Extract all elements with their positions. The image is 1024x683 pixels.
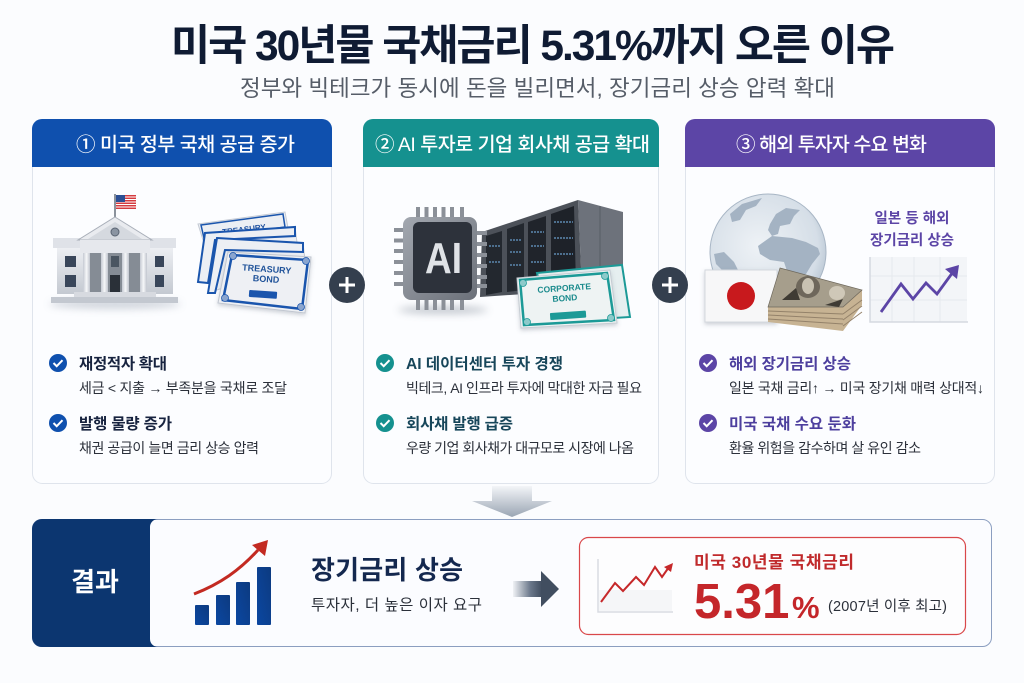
panel: result bbox=[32, 519, 992, 647]
icon: plus between panels 1 and 2 bbox=[329, 267, 365, 303]
bullet: AI data center bbox=[376, 354, 642, 396]
bullet: weak treasury demand bbox=[699, 414, 921, 456]
icon: AI chip: AI bbox=[425, 234, 462, 283]
arrow: to result value bbox=[513, 571, 559, 607]
icon: corporate bonds bbox=[517, 265, 630, 328]
icon: globe bbox=[710, 194, 826, 310]
bullet: fiscal deficit: 세금 < 지출 → 부족분을 국채로 조달 bbox=[79, 380, 287, 396]
panel 2 header: ② AI 투자로 기업 회사채 공급 확대 bbox=[375, 134, 650, 156]
bullet: overseas rates rising bbox=[699, 354, 984, 396]
icon: plus between panels 2 and 3 bbox=[652, 267, 688, 303]
bullet: corporate bond surge: 회사채 발행 급증 bbox=[406, 415, 513, 433]
panel 1 header: ① 미국 정부 국채 공급 증가 bbox=[76, 134, 295, 156]
panel 2 header bbox=[363, 119, 659, 167]
icon: treasury bonds: BOND bbox=[253, 273, 280, 285]
icon: corporate bonds: BOND bbox=[552, 292, 578, 304]
panel 1 header bbox=[32, 119, 332, 167]
callout label: 미국 30년물 국채금리 bbox=[694, 553, 854, 572]
bullet: issuance increase bbox=[49, 414, 259, 456]
bullet: fiscal deficit bbox=[49, 354, 287, 396]
bullet: corporate bond surge: 우량 기업 회사채가 대규모로 시장에 나옴 bbox=[406, 440, 634, 456]
chart: mini rising line bbox=[598, 559, 673, 612]
callout: 5.31% bbox=[580, 538, 966, 634]
text: long-term rates up: 장기금리 상승 bbox=[311, 555, 463, 585]
bullet: issuance increase: 채권 공급이 늘면 금리 상승 압력 bbox=[79, 440, 259, 456]
panel 3 header: ③ 해외 투자자 수요 변화 bbox=[736, 134, 927, 156]
text: long-term rates up bbox=[311, 555, 482, 614]
panel 3 header bbox=[685, 119, 995, 167]
arrow: down to result bbox=[472, 486, 552, 517]
icon: yen banknotes bbox=[768, 268, 862, 331]
icon: Japanese flag bbox=[705, 270, 777, 322]
title: 미국 30년물 국채금리 5.31%까지 오른 이유 bbox=[171, 23, 895, 70]
panel: overseas investor demand bbox=[685, 119, 995, 484]
label: overseas long-term rates up bbox=[870, 210, 954, 249]
label: overseas long-term rates up: 일본 등 해외 bbox=[874, 210, 950, 227]
icon: treasury bonds: TREASURY bbox=[222, 222, 267, 237]
bullet: weak treasury demand: 환율 위험을 감수하며 살 유인 감소 bbox=[729, 440, 921, 456]
subtitle: 정부와 빅테크가 동시에 돈을 빌리면서, 장기금리 상승 압력 확대 bbox=[240, 76, 835, 101]
bullet: issuance increase: 발행 물량 증가 bbox=[79, 415, 172, 433]
icon: rising bars and arrow bbox=[194, 540, 271, 625]
note: (2007년 이후 최고) bbox=[828, 598, 947, 615]
bullet: weak treasury demand: 미국 국채 수요 둔화 bbox=[729, 415, 856, 433]
icon: treasury bonds: TREASURY bbox=[242, 262, 292, 276]
text: long-term rates up: 투자자, 더 높은 이자 요구 bbox=[311, 596, 482, 614]
value: 5.31 bbox=[694, 575, 789, 629]
icon: treasury bonds bbox=[198, 212, 311, 313]
bullet: AI data center: 빅테크, AI 인프라 투자에 막대한 자금 필요 bbox=[406, 380, 642, 396]
result label: 결과 bbox=[71, 567, 119, 597]
chart: overseas rate line bbox=[870, 257, 968, 322]
result label bbox=[32, 519, 158, 647]
icon: AI chip bbox=[394, 207, 488, 314]
icon: government building with flag bbox=[49, 194, 181, 309]
label: overseas long-term rates up: 장기금리 상승 bbox=[870, 232, 954, 249]
bullet: corporate bond surge bbox=[376, 414, 634, 456]
icon: server racks bbox=[480, 200, 623, 297]
bullet: overseas rates rising: 해외 장기금리 상승 bbox=[729, 355, 851, 373]
panel: AI corporate bonds bbox=[363, 119, 659, 484]
icon: corporate bonds: CORPORATE bbox=[537, 281, 592, 295]
bullet: overseas rates rising: 일본 국채 금리↑ → 미국 장기채 매력 상대적↓ bbox=[729, 380, 984, 396]
panel: US treasury supply bbox=[32, 119, 332, 484]
bullet: fiscal deficit: 재정적자 확대 bbox=[79, 355, 167, 373]
value: % bbox=[792, 590, 820, 625]
bullet: AI data center: AI 데이터센터 투자 경쟁 bbox=[406, 355, 563, 373]
